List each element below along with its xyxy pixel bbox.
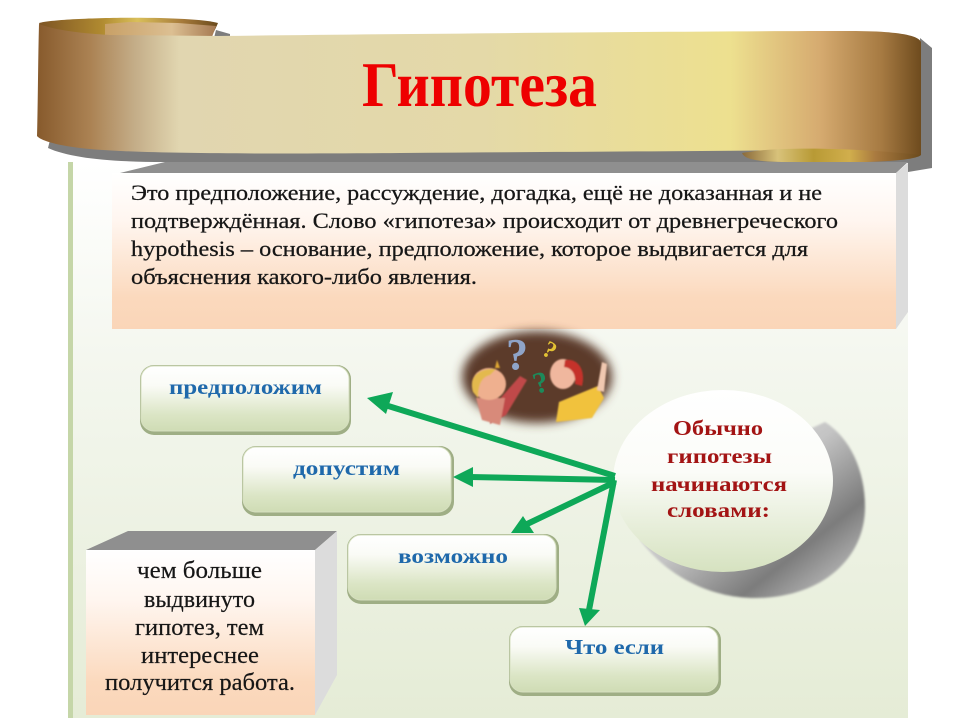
note front (86, 550, 315, 715)
arrow to допустим (453, 467, 615, 487)
right child (550, 359, 607, 422)
box right face (896, 163, 908, 329)
box top face (120, 162, 908, 173)
option box: предположим (140, 365, 351, 435)
scroll roll patch (105, 22, 216, 37)
definition text: объяснения какого-либо явления. (131, 264, 477, 289)
definition text: hypothesis – основание, предположение, которое выдвигается для (131, 236, 808, 261)
option box: возможно (347, 534, 559, 604)
definition text (131, 180, 838, 289)
definition box (112, 162, 908, 329)
note text: выдвинуто (144, 587, 255, 613)
definition text: Это предположение, рассуждение, догадка, ещё не доказанная и не (131, 180, 822, 205)
panel: background (68, 162, 908, 718)
scroll body (37, 24, 921, 157)
note right face (315, 531, 337, 715)
illustration: children and question marks: ? (529, 365, 552, 401)
disc text: начинаются (651, 472, 787, 496)
option box: возможно: возможно (398, 544, 508, 568)
note box (86, 531, 337, 715)
callout disc (613, 390, 865, 598)
arrow to что если (579, 480, 614, 626)
illustration: children and question marks (462, 330, 612, 425)
option box: что если (509, 626, 721, 696)
disc text (651, 416, 787, 522)
disc text: гипотезы (667, 444, 772, 468)
note text: чем больше (137, 558, 262, 584)
illustration: children and question marks: ? (538, 336, 561, 365)
arrow to предположим (367, 392, 615, 476)
box front (112, 173, 896, 329)
note text: получится работа. (105, 670, 295, 696)
disc front (613, 390, 833, 572)
disc text: словами: (667, 498, 770, 522)
arrows (367, 392, 615, 626)
note text: гипотез, тем (135, 615, 264, 641)
title: Гипотеза (362, 50, 597, 120)
option box: что если: Что если (565, 635, 664, 659)
scroll right roll (742, 149, 921, 162)
note text: интереснее (141, 643, 259, 669)
note text (105, 558, 295, 696)
option box: предположим: предположим (169, 375, 322, 399)
question marks: ? (506, 330, 528, 379)
option box: допустим (242, 446, 454, 516)
illustration background (462, 331, 612, 423)
scroll left roll (39, 18, 218, 38)
arrow to возможно (511, 482, 615, 533)
left child (472, 360, 527, 425)
scroll shadow (48, 30, 932, 172)
banner scroll (37, 18, 932, 172)
definition text: подтверждённая. Слово «гипотеза» происходит от древнегреческого (131, 208, 838, 233)
disc shadow (640, 422, 865, 598)
disc text: Обычно (673, 416, 763, 440)
note top face (86, 531, 337, 550)
option box: допустим: допустим (293, 456, 400, 480)
